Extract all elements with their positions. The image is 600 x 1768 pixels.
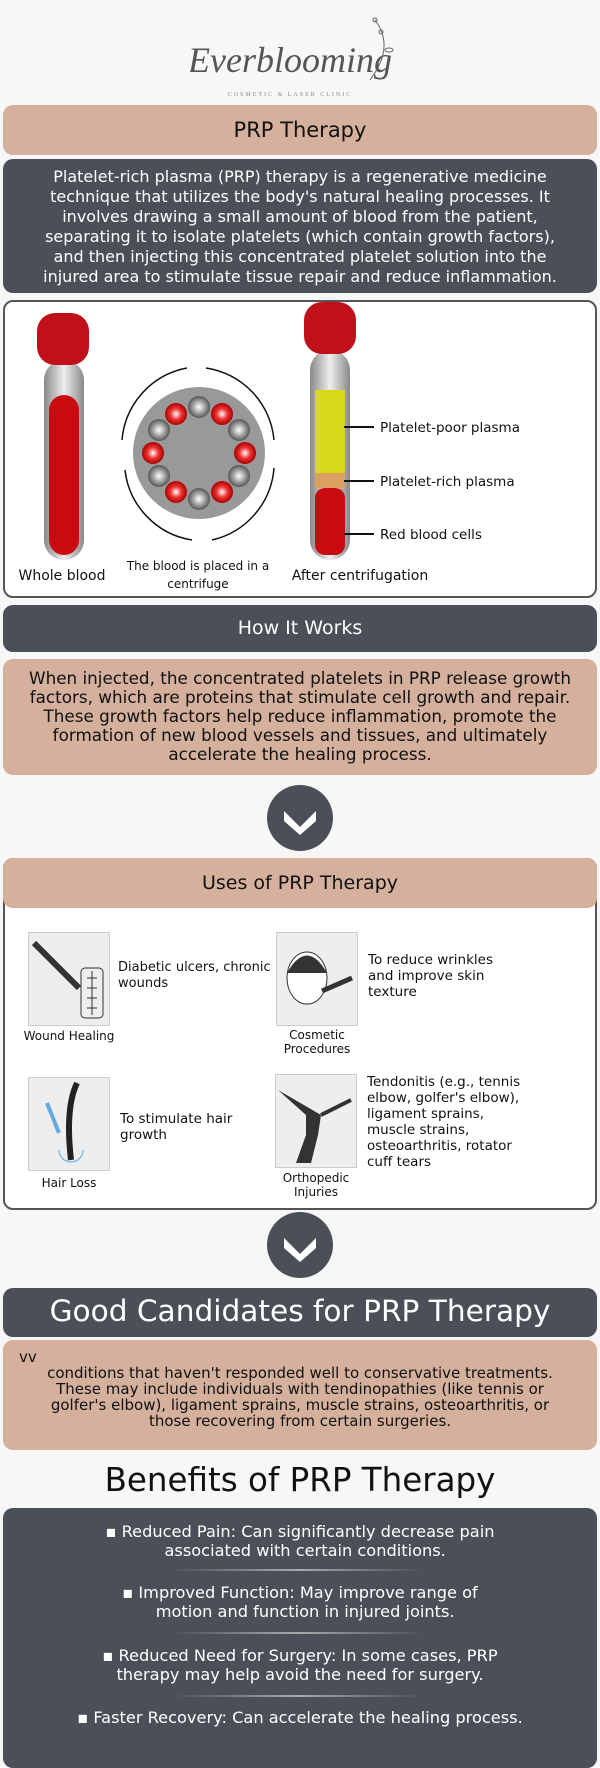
candidates text: These may include individuals with tendinopathies (like tennis or (56, 1380, 544, 1398)
use: hair loss: To stimulate hair (120, 1111, 232, 1127)
panel: benefits list (3, 1508, 597, 1768)
benefit 4: ▪ Faster Recovery: Can accelerate the healing process. (77, 1708, 523, 1727)
benefit 2: ▪ Improved Function: May improve range of (122, 1583, 478, 1602)
use: cosmetic (276, 932, 493, 1056)
use: wound healing: Wound Healing (24, 1029, 114, 1043)
benefit 3 (102, 1646, 498, 1684)
candidates text (3, 1340, 597, 1450)
how it works text: These growth factors help reduce inflammation, promote the (44, 706, 556, 726)
layer labels: Platelet-poor plasma (380, 420, 520, 436)
use: cosmetic: To reduce wrinkles (368, 952, 493, 968)
icon: separated tube (304, 302, 356, 560)
use: hair loss (28, 1077, 232, 1190)
how it works text: accelerate the healing process. (168, 744, 432, 764)
panel: uses (3, 858, 597, 1210)
benefit 1: associated with certain conditions. (164, 1541, 446, 1560)
benefit 1 (106, 1522, 494, 1560)
use: orthopedic: osteoarthritis, rotator (367, 1138, 512, 1154)
panel: centrifugation diagram (3, 300, 597, 598)
how it works text: When injected, the concentrated platelets in PRP release growth (29, 668, 571, 688)
layer labels: The blood is placed in a (126, 559, 269, 573)
layer labels: centrifuge (167, 577, 229, 591)
candidates text: those recovering from certain surgeries. (149, 1412, 451, 1430)
logo: COSMETIC & LASER CLINIC (228, 92, 352, 98)
use: orthopedic: Orthopedic (283, 1171, 349, 1185)
icon: whole blood tube (37, 313, 89, 560)
use: hair loss: growth (120, 1127, 167, 1143)
header: Uses of PRP Therapy: Uses of PRP Therapy (202, 872, 398, 894)
use: orthopedic: muscle strains, (367, 1122, 469, 1138)
how it works text: formation of new blood vessels and tissues, and ultimately (53, 725, 547, 745)
use: wound healing: Diabetic ulcers, chronic (118, 960, 271, 975)
layer labels: Whole blood (18, 568, 106, 584)
header: How It Works (3, 605, 597, 652)
intro text panel: involves drawing a small amount of blood from the patient, (62, 207, 538, 226)
intro text panel: Platelet-rich plasma (PRP) therapy is a regenerative medicine (53, 167, 547, 186)
how it works text (3, 659, 597, 775)
use: cosmetic: and improve skin (368, 968, 484, 984)
layer labels: Platelet-rich plasma (380, 474, 515, 490)
header: PRP Therapy (3, 105, 597, 155)
use: orthopedic (275, 1074, 520, 1199)
use: wound healing (24, 932, 271, 1043)
use: orthopedic: elbow, golfer's elbow), (367, 1090, 519, 1106)
benefit 3: ▪ Reduced Need for Surgery: In some cases, PRP (102, 1646, 498, 1665)
use: cosmetic: Procedures (284, 1042, 350, 1056)
use: hair loss: Hair Loss (42, 1176, 96, 1190)
intro text panel: technique that utilizes the body's natural healing processes. It (50, 187, 550, 206)
use: wound healing: wounds (118, 976, 168, 991)
use: orthopedic: Injuries (294, 1185, 338, 1199)
header: PRP Therapy: PRP Therapy (234, 118, 366, 142)
intro text panel: injured area to stimulate tissue repair and reduce inflammation. (43, 267, 557, 286)
icon: chevron 2 (267, 1212, 333, 1278)
icon: centrifuge (122, 368, 274, 540)
heading: Benefits: Benefits of PRP Therapy (105, 1461, 495, 1499)
icon: chevron 1 (267, 785, 333, 851)
use: orthopedic: Tendonitis (e.g., tennis (367, 1074, 520, 1090)
logo: Everblooming (190, 40, 392, 80)
use: cosmetic: texture (368, 984, 417, 1000)
header: Uses of PRP Therapy (3, 858, 597, 908)
header: Good Candidates (3, 1288, 597, 1337)
benefit 2: motion and function in injured joints. (156, 1602, 455, 1621)
layer labels: After centrifugation (292, 568, 428, 584)
logo (190, 18, 394, 98)
candidates text: vv (19, 1348, 37, 1366)
intro text panel: and then injecting this concentrated platelet solution into the (54, 247, 546, 266)
benefit 2 (122, 1583, 478, 1621)
benefit 3: therapy may help avoid the need for surgery. (116, 1665, 484, 1684)
use: orthopedic: cuff tears (367, 1154, 431, 1170)
how it works text: factors, which are proteins that stimulate cell growth and repair. (30, 687, 570, 707)
layer labels: Red blood cells (380, 527, 482, 543)
candidates text: golfer's elbow), ligament sprains, muscle strains, osteoarthritis, or (51, 1396, 549, 1414)
use: cosmetic: Cosmetic (289, 1028, 345, 1042)
intro text panel (3, 159, 597, 293)
layer labels (18, 420, 520, 591)
header: How It Works: How It Works (238, 617, 362, 639)
benefit 1: ▪ Reduced Pain: Can significantly decrease pain (106, 1522, 494, 1541)
use: orthopedic: ligament sprains, (367, 1106, 484, 1122)
candidates text: conditions that haven't responded well to conservative treatments. (47, 1364, 553, 1382)
intro text panel: separating it to isolate platelets (which contain growth factors), (45, 227, 555, 246)
header: Good Candidates: Good Candidates for PRP Therapy (50, 1294, 550, 1328)
